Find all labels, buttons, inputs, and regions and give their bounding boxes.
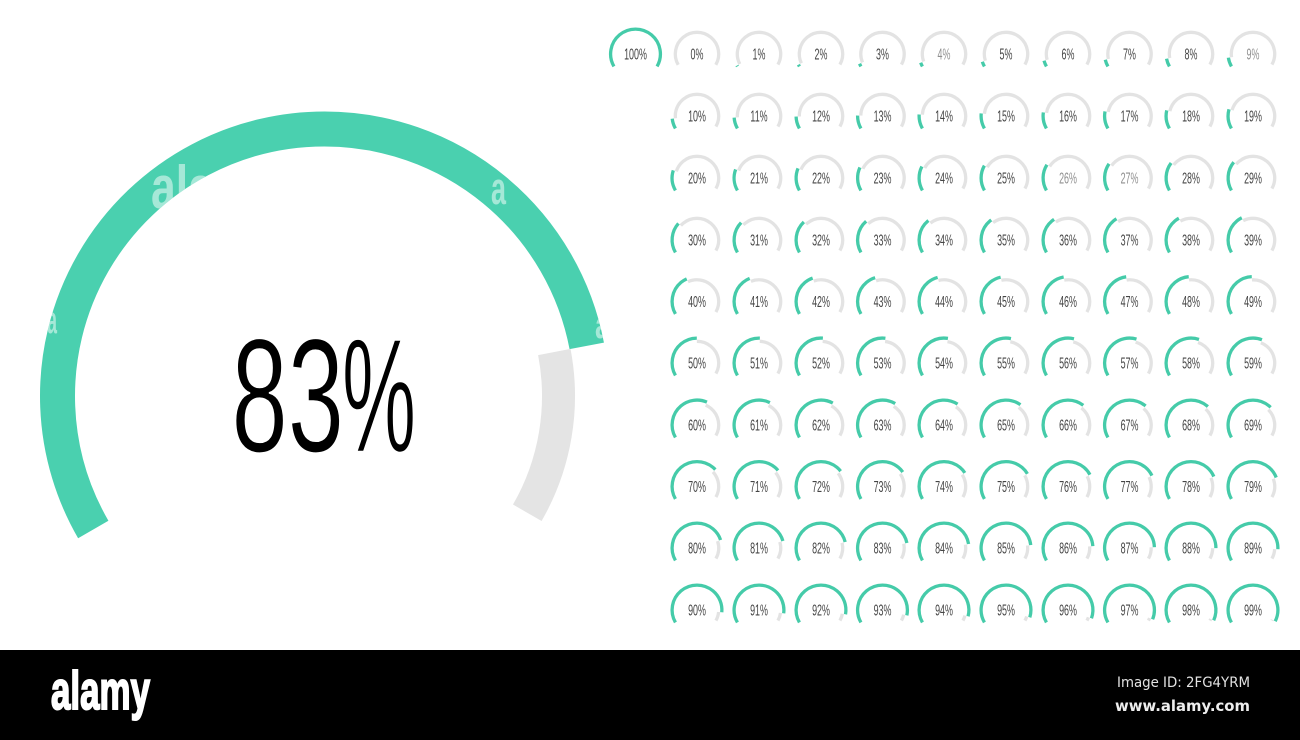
gauge 82%: 82% <box>812 540 830 557</box>
gauge 7% <box>1105 29 1154 66</box>
gauge 37%: 37% <box>1121 232 1138 249</box>
gauge 70%: 70% <box>688 479 706 496</box>
gauge 62% <box>796 400 846 437</box>
gauge 24%: 24% <box>935 170 953 187</box>
gauge 85%: 85% <box>997 540 1015 557</box>
gauge 20% <box>672 153 722 190</box>
gauge 52%: 52% <box>812 355 830 372</box>
gauge 14% <box>919 91 969 128</box>
gauge 84%: 84% <box>935 540 953 557</box>
gauge 93% <box>858 585 907 622</box>
gauge 29%: 29% <box>1244 170 1262 187</box>
gauge 56%: 56% <box>1059 355 1077 372</box>
gauge 4% <box>919 29 969 66</box>
gauge 70% <box>672 462 722 499</box>
gauge 3% <box>858 29 907 66</box>
gauge 56% <box>1043 338 1093 375</box>
gauge 45%: 45% <box>997 294 1015 311</box>
gauge 68%: 68% <box>1182 417 1200 434</box>
gauge 3%: 3% <box>876 46 889 63</box>
gauge 59% <box>1228 338 1278 375</box>
gauge 52% <box>796 338 846 375</box>
gauge 96%: 96% <box>1059 602 1077 619</box>
gauge 94%: 94% <box>935 602 953 619</box>
gauge 24% <box>919 153 969 190</box>
gauge 54% <box>919 338 969 375</box>
gauge 87% <box>1105 523 1154 560</box>
gauge 43% <box>858 277 907 314</box>
gauge 20%: 20% <box>688 170 706 187</box>
gauge 41% <box>734 277 784 314</box>
gauge 45% <box>981 277 1031 314</box>
gauge 9%: 9% <box>1247 46 1259 63</box>
gauge 39%: 39% <box>1244 232 1262 249</box>
gauge 33% <box>858 215 907 252</box>
large gauge watermark fragments <box>48 164 603 338</box>
gauge 46%: 46% <box>1059 294 1077 311</box>
gauge 69%: 69% <box>1244 417 1262 434</box>
website: www.alamy.com <box>1115 697 1250 715</box>
gauge 74%: 74% <box>935 479 953 496</box>
gauge 78%: 78% <box>1182 479 1200 496</box>
gauge 49%: 49% <box>1244 294 1262 311</box>
large gauge watermark fragments: ala <box>151 154 213 221</box>
footer band <box>0 650 1300 740</box>
gauge 42% <box>796 277 846 314</box>
gauge 83%: 83% <box>874 540 891 557</box>
gauge 22%: 22% <box>812 170 830 187</box>
gauge 57%: 57% <box>1121 355 1138 372</box>
gauge 34% <box>919 215 969 252</box>
gauge 18% <box>1166 91 1216 128</box>
gauge 44%: 44% <box>935 294 953 311</box>
gauge 66%: 66% <box>1059 417 1077 434</box>
gauge 75%: 75% <box>997 479 1015 496</box>
gauge 60% <box>672 400 722 437</box>
gauge 98%: 98% <box>1182 602 1200 619</box>
gauge 95% <box>981 585 1031 622</box>
gauge 90%: 90% <box>688 602 706 619</box>
gauge grid: 0 to 100 percent <box>611 29 1278 622</box>
gauge 50% <box>672 338 722 375</box>
gauge 43%: 43% <box>874 294 891 311</box>
gauge 66% <box>1043 400 1093 437</box>
gauge 81%: 81% <box>750 540 768 557</box>
gauge 36% <box>1043 215 1093 252</box>
gauge 26%: 26% <box>1059 170 1077 187</box>
gauge 5% <box>981 29 1031 66</box>
gauge 21% <box>734 153 784 190</box>
gauge 2% <box>796 29 846 66</box>
gauge 69% <box>1228 400 1278 437</box>
gauge 44% <box>919 277 969 314</box>
gauge 9% <box>1228 29 1278 66</box>
gauge 27%: 27% <box>1121 170 1138 187</box>
gauge 30% <box>672 215 722 252</box>
gauge 84% <box>919 523 969 560</box>
gauge 32%: 32% <box>812 232 830 249</box>
gauge 46% <box>1043 277 1093 314</box>
large gauge watermark fragments: a <box>595 305 611 347</box>
gauge 79% <box>1228 462 1278 499</box>
gauge 71% <box>734 462 784 499</box>
gauge 88%: 88% <box>1182 540 1200 557</box>
gauge 54%: 54% <box>935 355 953 372</box>
gauge 23% <box>858 153 907 190</box>
gauge 33%: 33% <box>874 232 891 249</box>
large gauge value: 83 <box>232 306 344 486</box>
gauge 57% <box>1105 338 1154 375</box>
gauge 83% <box>858 523 907 560</box>
gauge 7%: 7% <box>1123 46 1136 63</box>
gauge 19% <box>1228 91 1278 128</box>
gauge 25% <box>981 153 1031 190</box>
gauge 76%: 76% <box>1059 479 1077 496</box>
gauge 26% <box>1043 153 1093 190</box>
gauge 29% <box>1228 153 1278 190</box>
gauge 89%: 89% <box>1244 540 1262 557</box>
gauge 51% <box>734 338 784 375</box>
gauge 25%: 25% <box>997 170 1015 187</box>
gauge 86%: 86% <box>1059 540 1077 557</box>
image id: Image ID: 2FG4YRM <box>1117 675 1250 691</box>
gauge 21%: 21% <box>750 170 768 187</box>
gauge 17%: 17% <box>1121 108 1138 125</box>
gauge 8%: 8% <box>1185 46 1197 63</box>
gauge 0% <box>672 29 722 66</box>
gauge 28%: 28% <box>1182 170 1200 187</box>
gauge 16%: 16% <box>1059 108 1077 125</box>
gauge 28% <box>1166 153 1216 190</box>
gauge 67%: 67% <box>1121 417 1138 434</box>
large gauge watermark fragments: a <box>491 163 507 214</box>
gauge 1% <box>734 29 784 66</box>
gauge 73%: 73% <box>874 479 891 496</box>
gauge 79%: 79% <box>1244 479 1262 496</box>
gauge 31%: 31% <box>750 232 768 249</box>
gauge 48%: 48% <box>1182 294 1200 311</box>
gauge 31% <box>734 215 784 252</box>
gauge 22% <box>796 153 846 190</box>
gauge 5%: 5% <box>1000 46 1012 63</box>
gauge 19%: 19% <box>1244 108 1262 125</box>
gauge 64%: 64% <box>935 417 953 434</box>
gauge 14%: 14% <box>935 108 953 125</box>
gauge 15%: 15% <box>997 108 1015 125</box>
gauge 30%: 30% <box>688 232 706 249</box>
gauge 80%: 80% <box>688 540 706 557</box>
gauge 13% <box>858 91 907 128</box>
gauge 61%: 61% <box>750 417 768 434</box>
gauge 97% <box>1105 585 1154 622</box>
gauge 8% <box>1166 29 1216 66</box>
gauge 98% <box>1166 585 1216 622</box>
gauge 37% <box>1105 215 1154 252</box>
gauge 0%: 0% <box>691 46 703 63</box>
gauge 2%: 2% <box>815 46 827 63</box>
gauge 80% <box>672 523 722 560</box>
gauge 72%: 72% <box>812 479 830 496</box>
gauge 39% <box>1228 215 1278 252</box>
gauge 60%: 60% <box>688 417 706 434</box>
gauge 18%: 18% <box>1182 108 1200 125</box>
gauge 77%: 77% <box>1121 479 1138 496</box>
gauge 35% <box>981 215 1031 252</box>
gauge 76% <box>1043 462 1093 499</box>
gauge 32% <box>796 215 846 252</box>
large gauge: 83% <box>47 129 611 530</box>
gauge 68% <box>1166 400 1216 437</box>
gauge 40% <box>672 277 722 314</box>
gauge 10% <box>672 91 722 128</box>
gauge 62%: 62% <box>812 417 830 434</box>
gauge 47%: 47% <box>1121 294 1138 311</box>
alamy logo: alamy <box>51 661 150 721</box>
gauge 34%: 34% <box>935 232 953 249</box>
gauge 74% <box>919 462 969 499</box>
gauge 12%: 12% <box>812 108 830 125</box>
gauge 75% <box>981 462 1031 499</box>
gauge 38%: 38% <box>1182 232 1200 249</box>
gauge 15% <box>981 91 1031 128</box>
gauge 50%: 50% <box>688 355 706 372</box>
gauge 4%: 4% <box>938 46 950 63</box>
large gauge value: % <box>342 306 416 486</box>
gauge 55%: 55% <box>997 355 1015 372</box>
gauge 78% <box>1166 462 1216 499</box>
gauge 58%: 58% <box>1182 355 1200 372</box>
gauge 67% <box>1105 400 1154 437</box>
gauge 93%: 93% <box>874 602 891 619</box>
gauge 77% <box>1105 462 1154 499</box>
large gauge watermark fragments: a <box>47 300 57 342</box>
gauge 10%: 10% <box>688 108 706 125</box>
gauge 58% <box>1166 338 1216 375</box>
gauge 100% <box>611 29 660 66</box>
gauge 13%: 13% <box>874 108 891 125</box>
gauge 100%: 100% <box>624 46 647 63</box>
gauge 81% <box>734 523 784 560</box>
gauge 87%: 87% <box>1121 540 1138 557</box>
gauge 65% <box>981 400 1031 437</box>
gauge 41%: 41% <box>750 294 768 311</box>
gauge 96% <box>1043 585 1093 622</box>
gauge 6%: 6% <box>1062 46 1074 63</box>
gauge 95%: 95% <box>997 602 1015 619</box>
gauge 42%: 42% <box>812 294 830 311</box>
gauge 73% <box>858 462 907 499</box>
gauge 99% <box>1228 585 1278 622</box>
large gauge teal progress arc <box>57 129 592 530</box>
gauge 91%: 91% <box>750 602 768 619</box>
gauge 16% <box>1043 91 1093 128</box>
gauge 61% <box>734 400 784 437</box>
gauge 27% <box>1105 153 1154 190</box>
gauge 71%: 71% <box>750 479 768 496</box>
gauge 36%: 36% <box>1059 232 1077 249</box>
gauge 1%: 1% <box>753 46 765 63</box>
gauge 82% <box>796 523 846 560</box>
gauge 99%: 99% <box>1244 602 1262 619</box>
gauge 86% <box>1043 523 1093 560</box>
large gauge grey remainder arc <box>91 162 558 513</box>
gauge 64% <box>919 400 969 437</box>
gauge 63%: 63% <box>874 417 891 434</box>
gauge 11% <box>734 91 784 128</box>
gauge 88% <box>1166 523 1216 560</box>
gauge 97%: 97% <box>1121 602 1138 619</box>
gauge 47% <box>1105 277 1154 314</box>
gauge 72% <box>796 462 846 499</box>
gauge 51%: 51% <box>750 355 768 372</box>
gauge 53% <box>858 338 907 375</box>
gauge 89% <box>1228 523 1278 560</box>
gauge 48% <box>1166 277 1216 314</box>
gauge 6% <box>1043 29 1093 66</box>
gauge 55% <box>981 338 1031 375</box>
gauge 92% <box>796 585 846 622</box>
gauge 38% <box>1166 215 1216 252</box>
gauge 91% <box>734 585 784 622</box>
gauge 12% <box>796 91 846 128</box>
gauge 92%: 92% <box>812 602 830 619</box>
gauge 11%: 11% <box>750 108 768 125</box>
gauge 90% <box>672 585 722 622</box>
gauge 40%: 40% <box>688 294 706 311</box>
gauge 85% <box>981 523 1031 560</box>
gauge 94% <box>919 585 969 622</box>
gauge 59%: 59% <box>1244 355 1262 372</box>
gauge 23%: 23% <box>874 170 891 187</box>
gauge 63% <box>858 400 907 437</box>
gauge 35%: 35% <box>997 232 1015 249</box>
gauge 65%: 65% <box>997 417 1015 434</box>
gauge 17% <box>1105 91 1154 128</box>
gauge 49% <box>1228 277 1278 314</box>
gauge 53%: 53% <box>874 355 891 372</box>
